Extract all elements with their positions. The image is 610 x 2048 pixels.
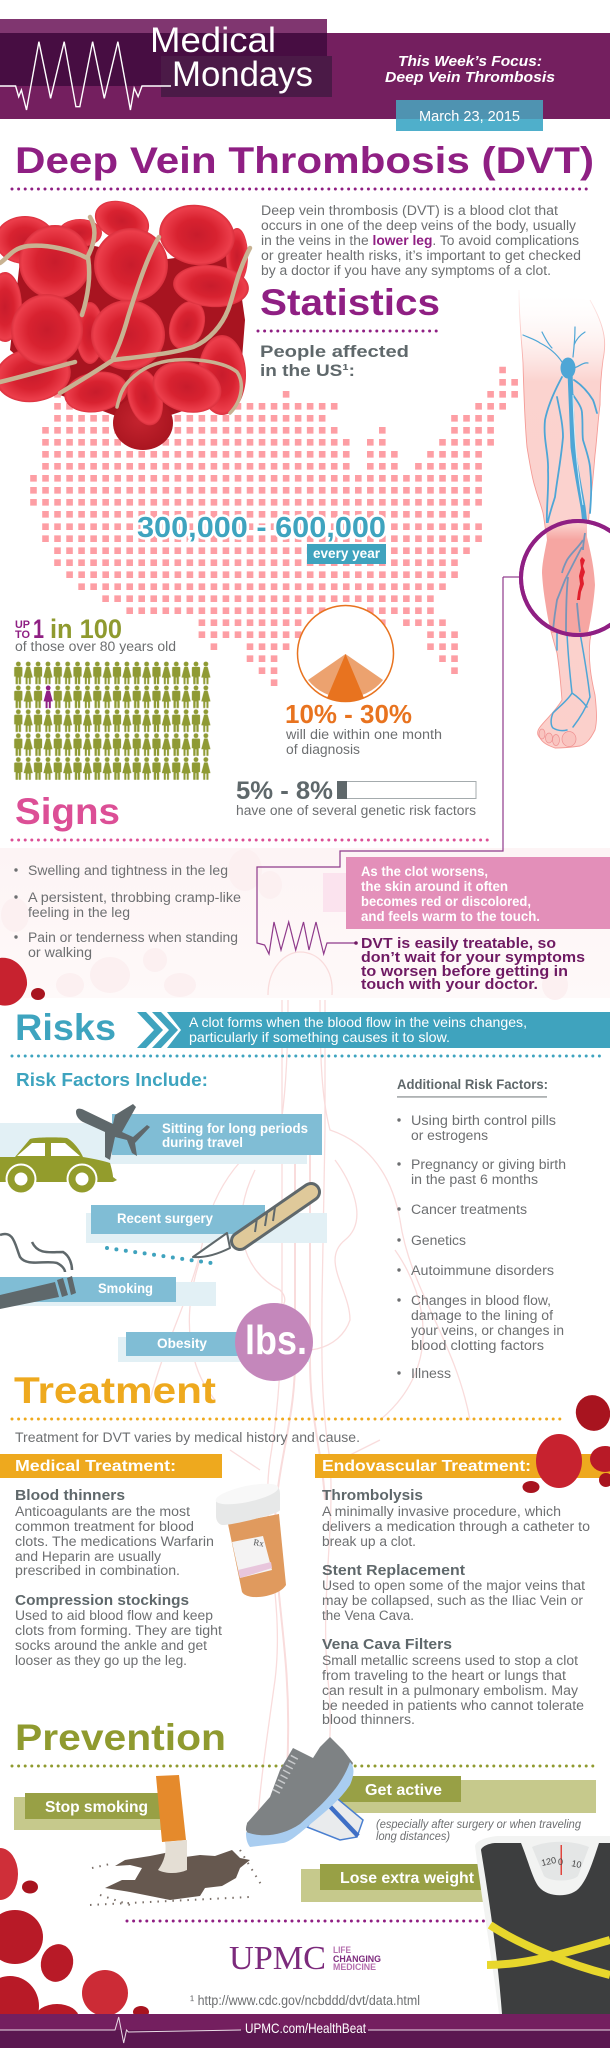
stat: 10% - 30%: will die within one month: [285, 727, 442, 742]
callout: clot worsens: and feels warm to the touch.: [361, 909, 540, 924]
sign list: [14, 863, 241, 960]
callout: clot worsens: As the clot worsens,: [361, 864, 488, 879]
stat: 1 in 100: TO: [15, 629, 30, 641]
intro paragraph: or greater health risks, it’s important to get checked: [261, 248, 581, 263]
illustration: leg with veins: [519, 290, 605, 748]
heading: Risks: Risks: [15, 1007, 116, 1048]
prevention: get active: [246, 1737, 596, 1847]
icon: lbs circle: lbs.: [245, 1317, 307, 1363]
title: Deep Vein Thrombosis (DVT): [15, 140, 594, 181]
icon: highlighted person: [44, 686, 53, 708]
icon: pill bottle: [214, 1480, 286, 1597]
list: additional risk factors: in the past 6 months: [411, 1172, 538, 1187]
background panel: faint blood cells: [0, 848, 610, 1000]
list: additional risk factors: Cancer treatments: [411, 1202, 527, 1217]
stat: 5% - 8% with bar: [236, 777, 476, 818]
heading: Prevention: Prevention: [15, 1717, 226, 1758]
note: (especially after surgery or when traveling: [376, 1817, 581, 1831]
stent replacement: [322, 1563, 585, 1623]
callout: DVT is treatable: touch with your doctor.: [361, 976, 538, 993]
panel: endovascular treatment: [315, 1454, 610, 1727]
subheading: risk factors include: Risk Factors Include:: [16, 1070, 208, 1090]
stat: 10% - 30%: [285, 699, 442, 757]
blood thinners: [15, 1488, 214, 1578]
vena cava filters: can result in a pulmonary embolism. May: [322, 1683, 578, 1698]
logo: UPMC: LIFE: [333, 1945, 351, 1955]
risk: sitting during travel: [0, 1104, 322, 1194]
subheading: people affected: [260, 342, 409, 380]
blood thinners: Blood thinners: [15, 1488, 125, 1504]
date tag: March 23, 2015: [419, 108, 520, 125]
panel: endovascular treatment: Endovascular Treatment:: [322, 1458, 531, 1475]
logo: UPMC: CHANGING: [333, 1954, 381, 1964]
thrombolysis: delivers a medication through a catheter to: [322, 1519, 590, 1534]
stat: 1 in 100: of those over 80 years old: [15, 639, 176, 654]
connector line with heartbeat: [257, 577, 519, 954]
vena cava filters: Small metallic screens used to stop a clot: [322, 1653, 578, 1668]
thrombolysis: Thrombolysis: [322, 1488, 423, 1504]
list: additional risk factors: your veins, or changes in: [411, 1323, 564, 1338]
footer bar: [0, 2014, 610, 2048]
icon: cigarette: [0, 1276, 76, 1309]
list: additional risk factors: damage to the lining of: [411, 1308, 553, 1323]
stat: 5% - 8% with bar: have one of several genetic risk factors: [236, 803, 476, 818]
prevention: stop smoking: [14, 1775, 262, 1905]
heading: Statistics: Statistics: [260, 282, 440, 323]
risk: smoking: [0, 1234, 216, 1309]
logo text: Mondays: Mondays: [172, 55, 313, 94]
list: additional risk factors: Autoimmune disorders: [411, 1263, 554, 1278]
list: additional risk factors: blood clotting factors: [411, 1338, 544, 1353]
logo text: Medical: Medical: [150, 21, 276, 60]
compression stockings: Used to aid blood flow and keep: [15, 1608, 213, 1623]
icon: car: [0, 1137, 117, 1194]
panel: medical treatment: [0, 1454, 286, 1668]
vena cava filters: blood thinners.: [322, 1712, 415, 1727]
blood thinners: and Heparin are usually: [15, 1549, 161, 1564]
dotted incision: [107, 1248, 211, 1263]
icon: scalpel: [193, 1192, 311, 1257]
focus text: Deep Vein Thrombosis: [385, 69, 555, 86]
stent replacement: may be collapsed, such as the Iliac Vein or: [322, 1593, 584, 1608]
icon: airplane: [76, 1104, 150, 1160]
stat: 10% - 30%: 10% - 30%: [285, 699, 412, 729]
stent replacement: the Vena Cava.: [322, 1608, 414, 1623]
icon: bathroom scale with tape: 0: [558, 1857, 563, 1867]
callout: DVT is treatable: don’t wait for your symptoms: [361, 949, 585, 966]
risk: recent surgery: [86, 1192, 327, 1263]
intro paragraph: occurs in one of the deep veins of the body, usually: [261, 218, 576, 233]
note: long distances): [376, 1829, 450, 1843]
panel: medical treatment: Medical Treatment:: [15, 1458, 176, 1475]
blood thinners: clots. The medications Warfarin: [15, 1534, 214, 1549]
icon: bathroom scale with tape: 120: [540, 1855, 557, 1868]
risk: obesity: Obesity: [157, 1336, 207, 1351]
risk: sitting during travel: Sitting for long periods: [162, 1121, 308, 1136]
icon: ash pile: [90, 1850, 262, 1905]
chart: pictogram of 100 people: [13, 662, 211, 781]
icon: bathroom scale with tape: [475, 1836, 610, 2014]
list: additional risk factors: Using birth control pills: [411, 1113, 556, 1128]
logo: UPMC: MEDICINE: [333, 1962, 376, 1972]
logo: UPMC: [229, 1940, 381, 1977]
thrombolysis: A minimally invasive procedure, which: [322, 1504, 561, 1519]
icon: bathroom scale with tape: 10: [571, 1858, 582, 1870]
stat: 1 in 100: 1: [33, 614, 44, 644]
focus text: This Week’s Focus:: [398, 53, 542, 70]
icon: heartbeat line: [0, 42, 171, 110]
chart: dotted US map: [30, 370, 518, 683]
list: additional risk factors: Illness: [411, 1366, 451, 1381]
thrombolysis: [322, 1488, 590, 1549]
compression stockings: clots from forming. They are tight: [15, 1623, 222, 1638]
footnote: ¹ http://www.cdc.gov/ncbddd/dvt/data.html: [190, 1993, 420, 2008]
prevention: stop smoking: Stop smoking: [45, 1799, 148, 1816]
tag: every year: every year: [313, 546, 381, 561]
risk: smoking: Smoking: [98, 1281, 153, 1296]
background: faint circulatory figure: [150, 952, 470, 1820]
callout: clot worsens: becomes red or discolored,: [361, 894, 531, 909]
list: additional risk factors: or estrogens: [411, 1128, 488, 1143]
stat: 5% - 8% with bar: 5% - 8%: [236, 777, 333, 805]
heading: Signs: Signs: [15, 791, 120, 832]
panel: header banner: [0, 19, 610, 131]
stat: 1 in 100: UP: [15, 619, 30, 631]
callout: clot worsens: the skin around it often: [361, 879, 508, 894]
stent replacement: Stent Replacement: [322, 1563, 465, 1579]
callout: DVT is treatable: to worsen before getting in: [361, 963, 568, 980]
list: additional risk factors: Changes in blood flow,: [411, 1293, 551, 1308]
banner: chevrons and clot text: A clot forms when the blood flow in the veins changes,: [189, 1014, 527, 1030]
note: [376, 1817, 581, 1843]
focus text: [385, 53, 555, 86]
intro paragraph: [261, 203, 581, 278]
subheading: people affected: People affected: [260, 342, 409, 361]
icon: smoke: [0, 1234, 72, 1272]
heading: Treatment: Treatment: [14, 1370, 216, 1411]
callout circle: clot in lower leg: [521, 521, 610, 635]
vena cava filters: be needed in patients who cannot tolerate: [322, 1698, 584, 1713]
sign list: Pain or tenderness when standing: [28, 930, 238, 945]
icon: running shoes: [246, 1737, 363, 1847]
intro paragraph: by a doctor if you have any symptoms of a clot.: [261, 263, 551, 278]
compression stockings: Compression stockings: [15, 1593, 189, 1609]
icon: pill bottle: Rx: [253, 1537, 265, 1549]
big number: 300,000 - 600,000: 300,000 - 600,000: [137, 512, 386, 544]
footer bar: UPMC.com/HealthBeat: [245, 2020, 366, 2036]
treatment intro: Treatment for DVT varies by medical history and cause.: [15, 1430, 360, 1445]
blood cells lower left: [0, 1848, 149, 2036]
icon: fibrin strands: [0, 217, 250, 413]
intro paragraph: in the veins in the lower leg. To avoid complications: [261, 233, 579, 248]
icon: blood clot illustration: [0, 194, 251, 450]
blood thinners: prescribed in combination.: [15, 1563, 180, 1578]
banner: chevrons and clot text: [137, 1012, 610, 1048]
date tag: [396, 100, 543, 131]
prevention: get active: Get active: [365, 1782, 442, 1799]
prevention: lose extra weight: Lose extra weight: [340, 1870, 475, 1887]
sign list: Swelling and tightness in the leg: [28, 863, 228, 878]
vena cava filters: Vena Cava Filters: [322, 1637, 452, 1653]
vena cava filters: from traveling to the heart or lungs that: [322, 1668, 566, 1683]
stent replacement: Used to open some of the major veins that: [322, 1578, 585, 1593]
compression stockings: socks around the ankle and get: [15, 1638, 207, 1653]
subheading: people affected: in the US¹:: [260, 361, 355, 380]
thrombolysis: break up a clot.: [322, 1534, 416, 1549]
callout: clot worsens: [323, 857, 610, 929]
risk: obesity: [118, 1303, 313, 1381]
stat: 1 in 100: in 100: [50, 614, 122, 644]
callout: DVT is treatable: DVT is easily treatable, so: [361, 935, 556, 952]
icon: cigarette butt: [156, 1775, 187, 1873]
tag: every year: [307, 544, 386, 564]
icon: lbs circle: [235, 1303, 313, 1381]
icon: footer heartbeat: [0, 2017, 241, 2043]
list: additional risk factors: [397, 1076, 566, 1381]
callout: DVT is treatable: [361, 935, 585, 993]
compression stockings: looser as they go up the leg.: [15, 1653, 187, 1668]
intro paragraph: Deep vein thrombosis (DVT) is a blood clot that: [261, 203, 558, 218]
vena cava filters: [322, 1637, 584, 1727]
prevention: lose extra weight: [301, 1864, 495, 1902]
list: additional risk factors: Genetics: [411, 1233, 466, 1248]
banner: chevrons and clot text: particularly if something causes it to slow.: [189, 1029, 450, 1045]
list: additional risk factors: Pregnancy or giving birth: [411, 1157, 566, 1172]
big number: 300,000 - 600,000: 300,000 - 600,000: [137, 512, 386, 544]
compression stockings: [15, 1593, 222, 1668]
risk: sitting during travel: during travel: [162, 1135, 243, 1150]
sign list: A persistent, throbbing cramp-like: [28, 890, 241, 905]
chart: mortality pie: [298, 606, 394, 702]
blood cells near signs: [0, 958, 45, 1006]
blood thinners: Anticoagulants are the most: [15, 1504, 190, 1519]
list: additional risk factors: Additional Risk Factors:: [397, 1076, 548, 1092]
stat: 10% - 30%: of diagnosis: [286, 742, 360, 757]
logo: UPMC: UPMC: [229, 1940, 326, 1977]
sign list: feeling in the leg: [28, 905, 130, 920]
risk: recent surgery: Recent surgery: [117, 1211, 213, 1226]
blood cells upper right: [522, 1390, 610, 1493]
sign list: or walking: [28, 945, 92, 960]
stat: 1 in 100: [15, 614, 176, 654]
blood thinners: common treatment for blood: [15, 1519, 194, 1534]
